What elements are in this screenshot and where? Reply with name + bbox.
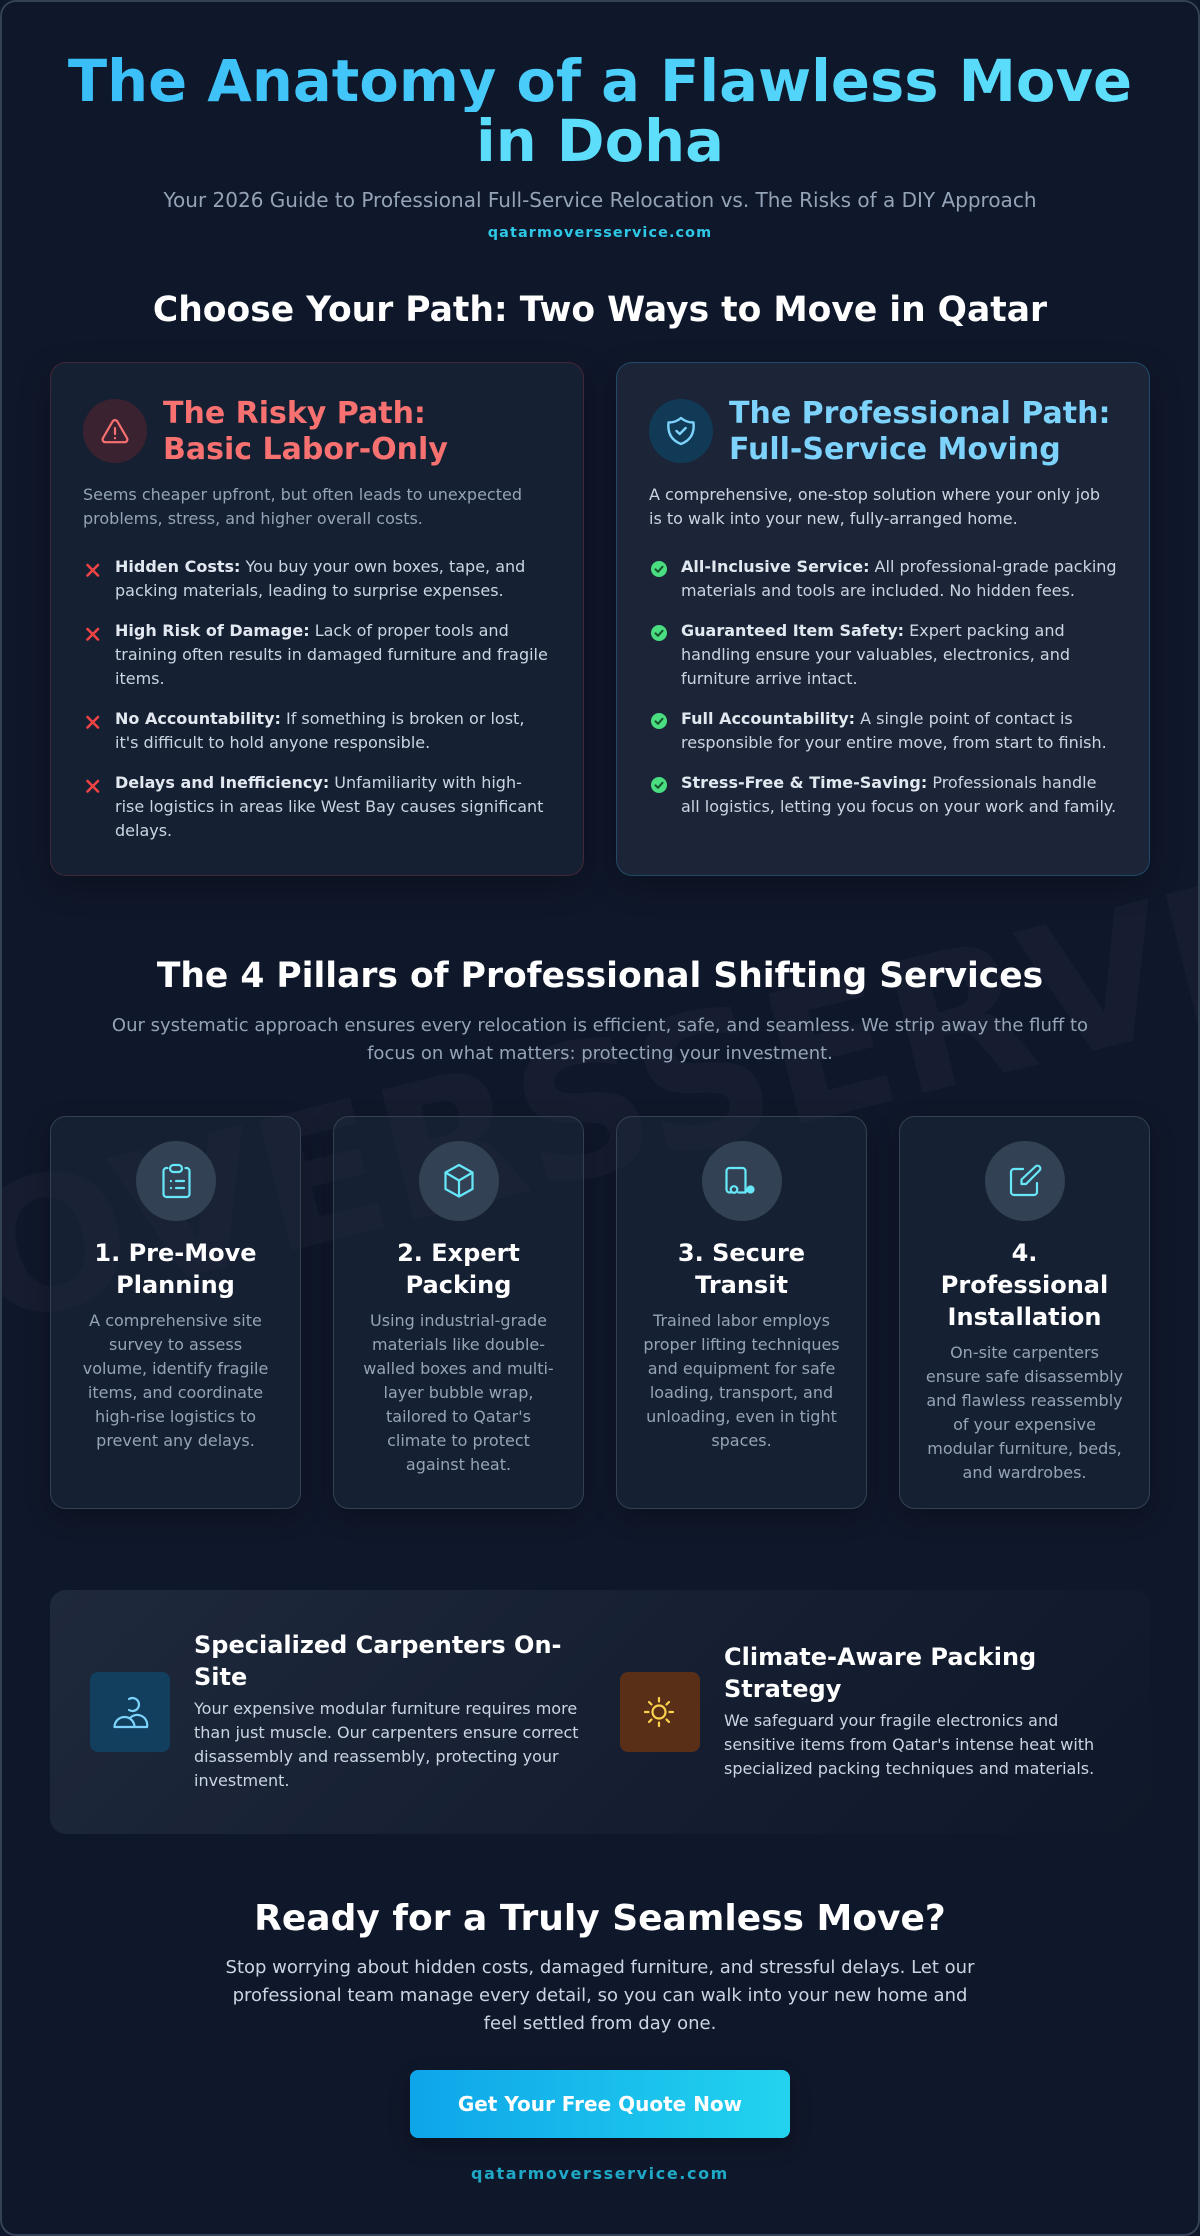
pillar 2 text: against heat. — [406, 1455, 511, 1474]
icon: dolly — [702, 1141, 782, 1221]
item: hidden costs — [115, 557, 525, 600]
pillar 3 title: 3. Secure — [678, 1239, 805, 1267]
pillar 4 text — [926, 1343, 1123, 1482]
item: high risk of damage: training often results in damaged furniture and fragile — [115, 645, 548, 664]
icon: cross — [86, 716, 100, 729]
item: hidden costs: packing materials, leading to surprise expenses. — [115, 581, 504, 600]
title: The Anatomy of a Flawless Move — [68, 48, 1132, 115]
pillar 4 text: modular furniture, beds, — [927, 1439, 1122, 1458]
item: no accountability: No Accountability: If something is broken or lost, — [115, 709, 524, 728]
professional path description — [649, 485, 1100, 528]
professional path title: Full-Service Moving — [729, 432, 1061, 467]
risky path title: The Risky Path: — [163, 396, 426, 431]
pillar 2 text: climate to protect — [387, 1431, 530, 1450]
call to action text: feel settled from day one. — [484, 2013, 716, 2034]
icon: clipboard — [136, 1141, 216, 1221]
pillar 1 title — [94, 1239, 257, 1299]
item: stress free — [681, 773, 1116, 816]
pillar 4 text: of your expensive — [953, 1415, 1096, 1434]
item: guaranteed safety — [681, 621, 1070, 688]
climate text: We safeguard your fragile electronics and — [724, 1711, 1058, 1730]
pillar 2 text: Using industrial-grade — [370, 1311, 547, 1330]
risky path description: Seems cheaper upfront, but often leads to unexpected — [83, 485, 522, 504]
pillars intro text: focus on what matters: protecting your investment. — [367, 1043, 833, 1064]
risky path description — [83, 485, 522, 528]
pillar 1 title: Planning — [116, 1271, 235, 1299]
pillar 1 text: survey to assess — [109, 1335, 242, 1354]
item: guaranteed safety: Guaranteed Item Safety: Expert packing and — [681, 621, 1065, 640]
pillar 3 text: spaces. — [711, 1431, 772, 1450]
pillar 4 title: 4. — [1012, 1239, 1037, 1267]
item: all inclusive: materials and tools are included. No hidden fees. — [681, 581, 1075, 600]
icon: cross — [86, 780, 100, 793]
pillar 2 title: Packing — [406, 1271, 511, 1299]
pillar 3 text: unloading, even in tight — [646, 1407, 837, 1426]
carpenters text: than just muscle. Our carpenters ensure correct — [194, 1723, 579, 1742]
climate title: Strategy — [724, 1675, 841, 1703]
carpenters text: Your expensive modular furniture requires more — [194, 1699, 577, 1718]
item: delays: delays. — [115, 821, 172, 840]
pillar 1 text: items, and coordinate — [88, 1383, 263, 1402]
pillar 4 title: Professional — [941, 1271, 1108, 1299]
pillar 3 text — [643, 1311, 840, 1450]
climate title — [724, 1643, 1036, 1703]
professional path title: The Professional Path: — [729, 396, 1110, 431]
carpenters title: Site — [194, 1663, 247, 1691]
item: no accountability — [115, 709, 524, 752]
carpenters text: disassembly and reassembly, protecting your — [194, 1747, 559, 1766]
pillar 3 text: proper lifting techniques — [643, 1335, 840, 1354]
icon: check — [651, 625, 667, 641]
item: high risk of damage — [115, 621, 548, 688]
pillar 4 — [899, 1116, 1150, 1509]
panel: professional path — [616, 362, 1150, 876]
title — [68, 48, 1132, 175]
call to action text: professional team manage every detail, so you can walk into your new home and — [233, 1985, 967, 2006]
risky path description: problems, stress, and higher overall costs. — [83, 509, 423, 528]
icon: box — [418, 1141, 498, 1221]
pillar 2 — [333, 1116, 584, 1509]
item: delays: rise logistics in areas like West Bay causes significant — [115, 797, 543, 816]
pillar 3 text: loading, transport, and — [650, 1383, 833, 1402]
pillar 3 title: Transit — [695, 1271, 788, 1299]
carpenters text: investment. — [194, 1771, 289, 1790]
website label top: qatarmoversservice.com — [488, 225, 712, 241]
pillar 2 text — [363, 1311, 554, 1474]
button: get quote — [410, 2070, 790, 2138]
item: stress free: all logistics, letting you focus on your work and family. — [681, 797, 1116, 816]
icon: carpenter — [90, 1672, 170, 1752]
item: delays — [115, 773, 543, 840]
icon: cross — [86, 628, 100, 641]
item: high risk of damage: items. — [115, 669, 165, 688]
pillar 1 title: 1. Pre-Move — [94, 1239, 257, 1267]
item: high risk of damage: High Risk of Damage: Lack of proper tools and — [115, 621, 509, 640]
item: full accountability: Full Accountability: A single point of contact is — [681, 709, 1073, 728]
pillar 1 text — [83, 1311, 268, 1450]
pillar 4 text: and flawless reassembly — [926, 1391, 1123, 1410]
climate title: Climate-Aware Packing — [724, 1643, 1036, 1671]
professional path title — [729, 396, 1110, 467]
pillar 2 title: 2. Expert — [397, 1239, 520, 1267]
pillar 1 text: A comprehensive site — [89, 1311, 262, 1330]
pillar 2 text: materials like double- — [372, 1335, 545, 1354]
item: full accountability: responsible for your entire move, from start to finish. — [681, 733, 1107, 752]
pillar 2 text: tailored to Qatar's — [386, 1407, 531, 1426]
pillar 3 text: Trained labor employs — [653, 1311, 830, 1330]
item: delays: Delays and Inefficiency: Unfamiliarity with high- — [115, 773, 522, 792]
icon: edit — [984, 1141, 1064, 1221]
pillar 1 text: prevent any delays. — [96, 1431, 255, 1450]
risky path title: Basic Labor-Only — [163, 432, 448, 467]
heading: call to action: Ready for a Truly Seamless Move? — [254, 1898, 946, 1939]
icon: check — [651, 777, 667, 793]
icon: cross — [86, 564, 100, 577]
item: full accountability — [681, 709, 1107, 752]
pillar 3 text: and equipment for safe — [648, 1359, 835, 1378]
pillar 4 text: ensure safe disassembly — [926, 1367, 1123, 1386]
item: all inclusive: All-Inclusive Service: All professional-grade packing — [681, 557, 1117, 576]
item: hidden costs: Hidden Costs: You buy your own boxes, tape, and — [115, 557, 525, 576]
heading: choose your path: Choose Your Path: Two Ways to Move in Qatar — [153, 290, 1047, 330]
professional path description: A comprehensive, one-stop solution where your only job — [649, 485, 1100, 504]
pillar 4 title: Installation — [948, 1303, 1101, 1331]
panel: advantages — [50, 1590, 1150, 1834]
risky path title — [163, 396, 448, 467]
panel: risky path — [50, 362, 584, 876]
pillar 2 text: walled boxes and multi- — [363, 1359, 554, 1378]
pillar 3 title — [678, 1239, 805, 1299]
call to action text — [226, 1957, 974, 2034]
pillars intro text: Our systematic approach ensures every relocation is efficient, safe, and seamless. We strip away the fluff to — [112, 1015, 1088, 1036]
item: all inclusive — [681, 557, 1117, 600]
item: no accountability: it's difficult to hold anyone responsible. — [115, 733, 430, 752]
icon: check — [651, 561, 667, 577]
heading: 4 pillars: The 4 Pillars of Professional Shifting Services — [157, 956, 1043, 996]
icon: shield — [649, 399, 713, 463]
website label bottom: qatarmoversservice.com — [471, 2164, 729, 2183]
pillar 1 text: high-rise logistics to — [95, 1407, 256, 1426]
item: guaranteed safety: furniture arrive intact. — [681, 669, 858, 688]
climate text: sensitive items from Qatar's intense heat with — [724, 1735, 1094, 1754]
subtitle: Your 2026 Guide to Professional Full-Service Relocation vs. The Risks of a DIY Approach — [164, 188, 1036, 212]
carpenters text — [194, 1699, 579, 1790]
climate text: specialized packing techniques and materials. — [724, 1759, 1094, 1778]
pillar 4 text: and wardrobes. — [963, 1463, 1086, 1482]
button: get quote: Get Your Free Quote Now — [458, 2092, 742, 2116]
item: stress free: Stress-Free & Time-Saving: Professionals handle — [681, 773, 1096, 792]
pillar 2 text: layer bubble wrap, — [384, 1383, 533, 1402]
pillar 1 text: volume, identify fragile — [83, 1359, 268, 1378]
pillars intro text — [112, 1015, 1088, 1064]
pillar 4 text: On-site carpenters — [950, 1343, 1099, 1362]
professional path description: is to walk into your new, fully-arranged home. — [649, 509, 1018, 528]
pillar 1 — [50, 1116, 301, 1509]
pillar 3 — [616, 1116, 867, 1509]
icon: warning — [83, 399, 147, 463]
carpenters title: Specialized Carpenters On- — [194, 1631, 562, 1659]
icon: check — [651, 713, 667, 729]
pillar 4 title — [941, 1239, 1108, 1331]
item: guaranteed safety: handling ensure your valuables, electronics, and — [681, 645, 1070, 664]
pillar 2 title — [397, 1239, 520, 1299]
climate text — [724, 1711, 1094, 1778]
call to action text: Stop worrying about hidden costs, damaged furniture, and stressful delays. Let our — [226, 1957, 974, 1978]
title: in Doha — [476, 108, 724, 175]
carpenters title — [194, 1631, 562, 1691]
icon: sun — [620, 1672, 700, 1752]
